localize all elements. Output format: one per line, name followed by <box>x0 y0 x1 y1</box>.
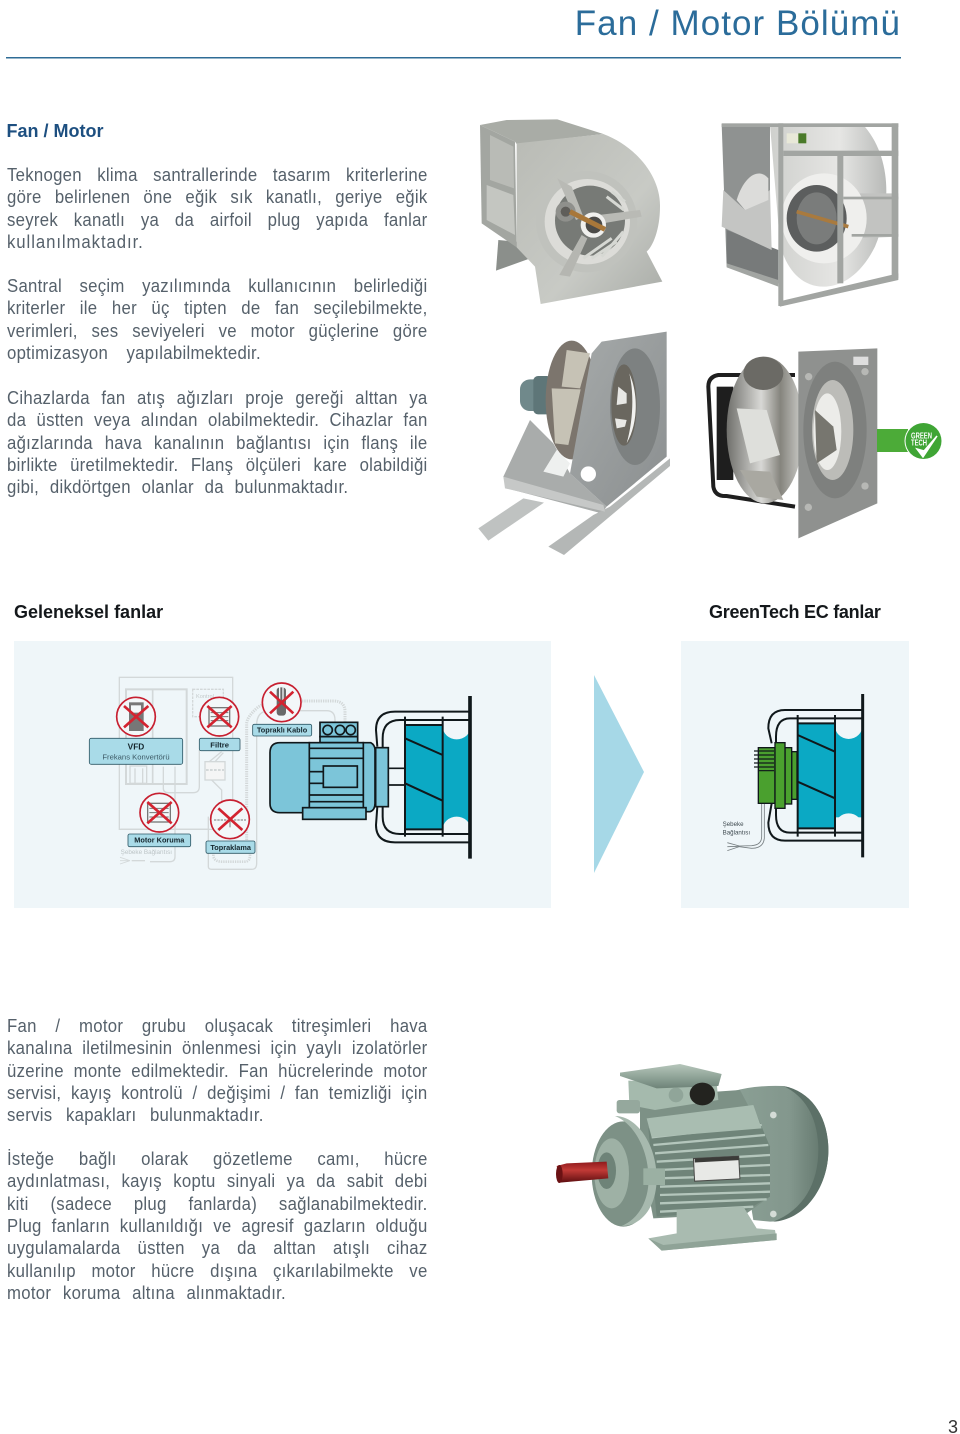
label: filter <box>199 738 240 751</box>
icon: grounding crossed out <box>211 800 249 839</box>
text block: lower paragraph 1: servisi, kayış kontrolü / değişimi / fan temizliği için <box>6 1083 427 1103</box>
photo: electric motor <box>556 1064 828 1251</box>
arrow: conventional to EC <box>594 675 644 873</box>
text block: lower paragraph 2: İsteğe bağlı olarak gözetleme camı, hücre <box>6 1149 427 1169</box>
text block: lower paragraph 2: motor koruma altına alınmaktadır. <box>6 1283 286 1303</box>
text block: lower paragraph 1: servis kapakları bulunmaktadır. <box>6 1105 263 1125</box>
text block: intro paragraph 2 <box>6 276 427 363</box>
text block: lower paragraph 2: Plug fanların kullanıldığı ve agresif gazların olduğu <box>6 1216 427 1236</box>
panel: GreenTech EC fans <box>681 641 909 908</box>
heading: Fan / Motor: Fan / Motor <box>6 121 104 141</box>
text block: intro paragraph 2: verimleri, ses seviyeleri ve motor güçlerine göre <box>6 321 427 341</box>
icon: VFD crossed out <box>117 697 155 736</box>
text block: intro paragraph 1: seyrek kanatlı ya da airfoil plug yapıda fanlar <box>6 210 427 230</box>
text block: lower paragraph 1: kanalına iletilmesinin önlenmesi için yaylı izolatörler <box>6 1038 427 1058</box>
text block: intro paragraph 3: ağızlarında hava kanalının bağlantısı için flanş ile <box>6 433 427 453</box>
badge: GreenTech <box>877 422 942 460</box>
icon: earthed cable crossed out <box>262 683 301 722</box>
photo: EC plug fan <box>708 348 877 538</box>
drawing: EC motor <box>754 743 797 808</box>
label: earthed cable <box>253 724 312 736</box>
text block: intro paragraph 2: kriterler ile her üç tipten de fan seçilebilmekte, <box>6 298 427 318</box>
heading: GreenTech EC fans: GreenTech EC fanlar <box>709 602 881 622</box>
text block: lower paragraph 2: kiti (sadece plug fanlarda) sağlanabilmektedir. <box>6 1194 427 1214</box>
heading: conventional fans: Geleneksel fanlar <box>14 602 163 622</box>
photo: plug fan with motor <box>478 332 670 555</box>
label: VFD <box>89 738 183 764</box>
title: Fan / Motor Bölümü <box>575 4 901 43</box>
text block: intro paragraph 3 <box>6 388 428 497</box>
diagram: conventional fan system <box>89 677 471 869</box>
text block: intro paragraph 3: Cihazlarda fan atış ağızları proje gereği alttan ya <box>6 388 427 408</box>
title rule <box>6 57 901 58</box>
drawing: fan impeller <box>376 696 471 859</box>
text block: intro paragraph 1 <box>6 165 428 252</box>
label: VFD: Frekans Konvertörü <box>102 753 170 762</box>
label: earthed cable: Topraklı Kablo <box>257 726 308 735</box>
text block: intro paragraph 3: da üstten veya alından olabilmektedir. Cihazlar fan <box>6 410 427 430</box>
diagram: conventional fan system: Kontrol <box>196 694 214 700</box>
label: filter: Filtre <box>210 740 229 749</box>
text block: lower paragraph 2: uygulamalarda üstten ya da alttan atışlı cihaz <box>6 1238 427 1258</box>
label: motor protection <box>128 834 191 847</box>
text block: lower paragraph 1 <box>6 1016 428 1125</box>
text block: intro paragraph 1: Teknogen klima santrallerinde tasarım kriterlerine <box>6 165 427 185</box>
diagram: EC fan system <box>723 694 863 857</box>
panel: conventional fans <box>14 641 551 908</box>
text block: lower paragraph 2: kullanılıp motor hücre dışına çıkarılabilmekte ve <box>6 1260 427 1280</box>
photo: forward-curved fan <box>480 119 662 304</box>
label: mains connection: Şebeke Bağlantısı <box>121 849 172 856</box>
drawing: electric motor <box>270 722 405 819</box>
label: motor protection: Motor Koruma <box>134 836 185 845</box>
label: grounding: Topraklama <box>210 843 252 852</box>
label: mains connection <box>723 821 750 836</box>
photo: backward-curved framed fan <box>722 123 898 307</box>
text block: lower paragraph 2 <box>6 1149 427 1303</box>
text block: intro paragraph 3: gibi, dikdörtgen olanlar da bulunmaktadır. <box>6 477 348 497</box>
text block: intro paragraph 1: kullanılmaktadır. <box>6 232 143 252</box>
label: VFD: VFD <box>128 741 144 751</box>
label: mains connection: Bağlantısı <box>723 829 750 836</box>
badge: GreenTech: TECH <box>911 438 927 448</box>
label: grounding <box>206 841 255 853</box>
text block: intro paragraph 1: göre belirlenen öne eğik sık kanatlı, geriye eğik <box>6 187 427 207</box>
drawing: EC impeller <box>768 694 863 857</box>
text block: intro paragraph 2: Santral seçim yazılımında kullanıcının belirlediği <box>6 276 427 296</box>
mains cable <box>727 804 764 851</box>
text block: intro paragraph 3: birlikte üretilmektedir. Flanş ölçüleri kare olabildiği <box>6 455 427 475</box>
text block: intro paragraph 2: optimizasyon yapılabilmektedir. <box>6 343 260 363</box>
icon: filter crossed out <box>200 697 239 736</box>
label: mains connection: Şebeke <box>723 821 744 828</box>
text block: lower paragraph 2: aydınlatması, kayış koptu sinyali ya da sabit debi <box>6 1171 427 1191</box>
text block: lower paragraph 1: Fan / motor grubu oluşacak titreşimleri hava <box>6 1016 427 1036</box>
badge: GreenTech: GREEN <box>911 430 932 440</box>
icon: motor protection crossed out <box>140 793 179 832</box>
text block: lower paragraph 1: üzerine monte edilmektedir. Fan hücrelerinde motor <box>6 1061 427 1081</box>
